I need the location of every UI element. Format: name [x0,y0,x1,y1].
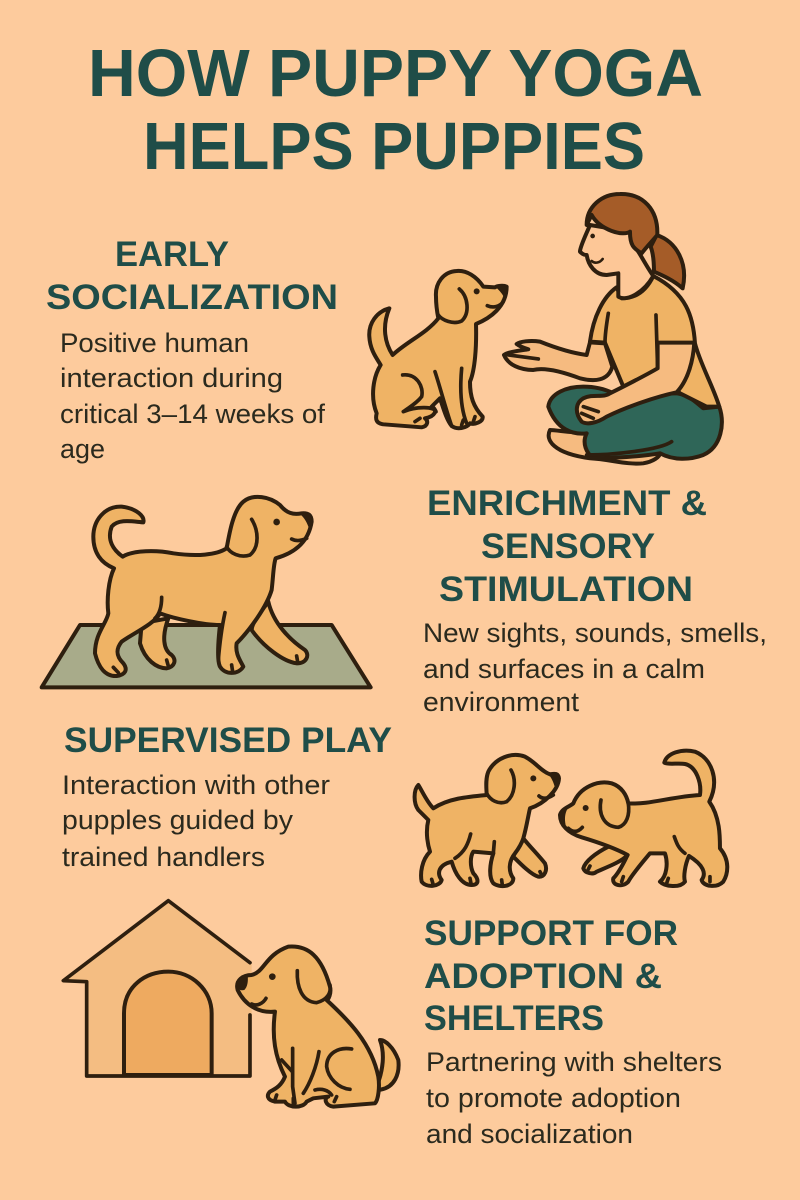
far legs [140,618,174,668]
text: enrichment description: and surfaces in a calm [423,654,705,684]
illustration: sitting puppy facing woman [369,271,507,428]
title: HELPS PUPPIES [143,109,645,184]
heading: enrichment and sensory stimulation: ENRICHMENT & [427,484,707,523]
text: enrichment description: New sights, sounds, smells, [423,618,767,648]
text: supervised play description: trained handlers [62,842,265,872]
heading: early socialization: EARLY [115,235,229,274]
text: adoption description: and socialization [426,1119,633,1149]
heading: support for adoption and shelters: ADOPTION & [424,957,662,996]
yoga mat [42,625,371,687]
text: adoption description: to promote adoption [426,1083,681,1113]
hair [587,194,657,253]
text: supervised play description: Interaction with other [62,770,330,800]
text: early socialization description: critical 3–14 weeks of [60,399,326,429]
illustration: two puppies playing [415,751,727,886]
foot [549,430,660,464]
right puppy [559,751,727,886]
heading: enrichment and sensory stimulation: SENSORY [481,527,655,566]
text: early socialization description: interaction during [60,363,283,393]
text: adoption description [426,1047,722,1149]
heading: enrichment and sensory stimulation: STIMULATION [439,570,693,609]
arms [504,341,612,380]
heading: support for adoption and shelters [424,914,678,1038]
text: early socialization description: Positive human [60,328,249,358]
head [580,225,653,298]
title [88,36,703,184]
heading: supervised play: SUPERVISED PLAY [64,721,392,760]
text: supervised play description [62,770,330,872]
text: supervised play description: pupples guided by [62,805,294,835]
text: adoption description: Partnering with shelters [426,1047,722,1077]
text: enrichment description: environment [423,687,580,717]
text: early socialization description [60,328,326,464]
ponytail [651,235,684,288]
text: early socialization description: age [60,434,105,464]
illustration: puppy walking on yoga mat [42,497,371,687]
illustration: dog house [63,901,252,1076]
heading: early socialization: SOCIALIZATION [46,278,338,317]
left puppy [415,755,560,886]
illustration: sitting puppy by dog house [236,947,399,1107]
heading: early socialization [46,235,338,317]
title: HOW PUPPY YOGA [88,36,703,111]
shirt [590,276,719,407]
illustration: seated woman with ponytail [504,194,722,464]
heading: support for adoption and shelters: SUPPORT FOR [424,914,678,953]
legs [548,387,722,459]
heading: enrichment and sensory stimulation [427,484,707,609]
text: enrichment description [423,618,767,717]
puppy body [93,497,312,676]
heading: support for adoption and shelters: SHELTERS [424,999,604,1038]
